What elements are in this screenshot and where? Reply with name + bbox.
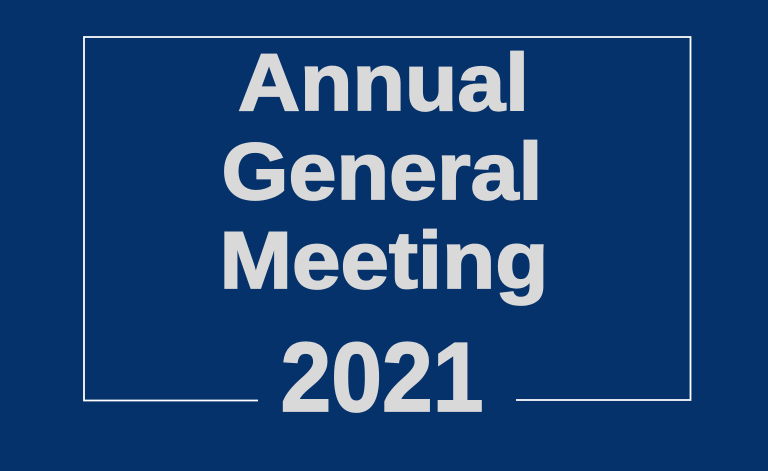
title: Meeting (220, 216, 548, 306)
year: 2021 (280, 322, 484, 432)
title: Annual (238, 38, 529, 128)
title (220, 38, 548, 306)
frame with gap around the year (84, 37, 690, 400)
title: General (222, 127, 542, 217)
